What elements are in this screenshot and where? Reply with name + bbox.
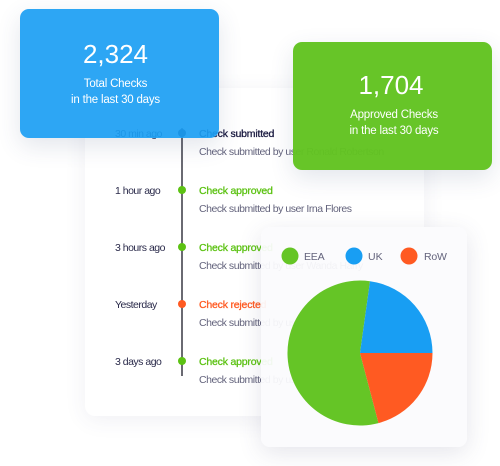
chart legend: UK [368, 251, 383, 263]
panel: regional pie chart [261, 227, 467, 447]
timeline entry 3: check approved: Check submitted by user Wanda Harry [199, 260, 363, 272]
timeline entry 4: check rejected: Check rejected [199, 299, 266, 311]
chart legend: EEA [304, 251, 325, 263]
chart legend [282, 248, 447, 264]
timeline entry 1: check submitted: Check submitted by user Ronald Robertson [199, 146, 384, 158]
pie chart [288, 280, 432, 426]
panel: activity timeline [85, 88, 424, 416]
timeline vertical line [180, 128, 182, 376]
approved checks label: Approved Checks [350, 109, 438, 121]
total checks label: in the last 30 days [71, 94, 160, 106]
approved checks label [350, 109, 438, 136]
timeline entry 1: check submitted: 30 min ago [115, 128, 162, 140]
timeline entry 1: check submitted [115, 128, 384, 158]
timeline entry 4: check rejected: Yesterday [115, 299, 157, 311]
timeline entry 5: check approved: 3 days ago [115, 356, 161, 368]
timeline entry 4: check rejected: Check submitted by user [199, 317, 304, 329]
approved checks value: 1,704 [358, 70, 424, 100]
total checks label: Total Checks [84, 78, 147, 90]
timeline entry 3: check approved: 3 hours ago [115, 242, 165, 254]
total checks value: 2,324 [83, 39, 148, 69]
timeline entry 5: check approved: Check submitted by user [199, 374, 304, 386]
approved checks label: in the last 30 days [350, 124, 438, 136]
timeline entry 2: check approved [115, 185, 352, 215]
timeline entry 2: check approved: 1 hour ago [115, 185, 160, 197]
card: total checks [20, 9, 219, 138]
card: approved checks [293, 42, 492, 170]
timeline entry 5: check approved: Check approved [199, 356, 273, 368]
timeline entry 3: check approved: Check approved [199, 242, 273, 254]
timeline entry 3: check approved [115, 242, 363, 272]
timeline entry 2: check approved: Check approved [199, 185, 273, 197]
total checks label [71, 78, 160, 106]
timeline entry 1: check submitted: Check submitted [199, 128, 274, 140]
timeline entry 4: check rejected [115, 299, 304, 329]
chart legend: RoW [424, 251, 447, 263]
timeline entry 2: check approved: Check submitted by user Irna Flores [199, 203, 352, 215]
